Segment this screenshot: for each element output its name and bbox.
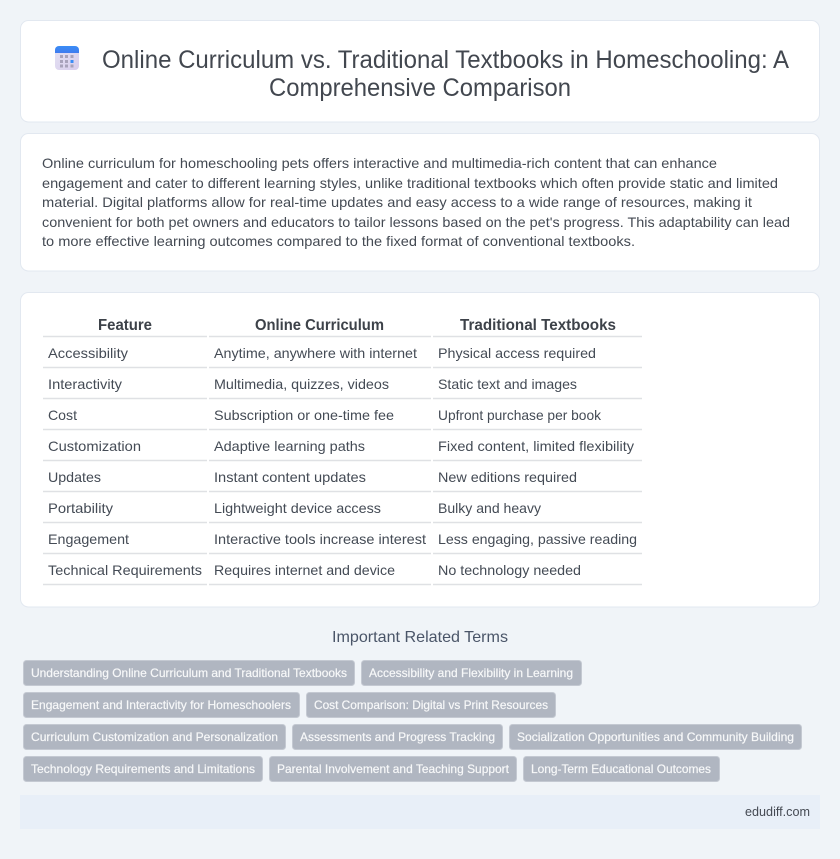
row: accessibility: Anytime, anywhere with internet (214, 345, 417, 361)
row: portability (48, 500, 541, 516)
tag: Curriculum Customization and Personalization (31, 730, 278, 744)
row: customization (48, 438, 634, 454)
row: portability: Bulky and heavy (438, 500, 541, 516)
row: interactivity (48, 376, 577, 392)
table header: Online Curriculum (255, 317, 384, 334)
row: portability: Portability (48, 500, 113, 516)
tag: Cost Comparison: Digital vs Print Resources (314, 698, 548, 712)
tag (270, 756, 516, 782)
title (102, 46, 789, 102)
row: cost: Subscription or one-time fee (214, 407, 394, 423)
row: updates: New editions required (438, 469, 577, 485)
panel: header (20, 20, 820, 122)
row: cost (48, 407, 602, 423)
row: accessibility (48, 345, 596, 361)
tag: Accessibility and Flexibility in Learning (369, 666, 573, 680)
row: portability: Lightweight device access (214, 500, 381, 516)
tag (510, 724, 802, 750)
tag: Long-Term Educational Outcomes (531, 762, 711, 776)
row: customization: Fixed content, limited flexibility (438, 438, 634, 454)
table header: Feature (98, 317, 152, 334)
row: technical requirements: No technology needed (438, 562, 581, 578)
title: Online Curriculum vs. Traditional Textbooks in Homeschooling: A (102, 46, 789, 74)
tag (24, 692, 300, 718)
text block: introduction paragraph: to more effective learning outcomes compared to the fixed format of conventional textbooks. (42, 233, 635, 249)
tag: Socialization Opportunities and Community Building (517, 730, 794, 744)
heading: important related terms: Important Related Terms (332, 629, 508, 646)
row: cost: Upfront purchase per book (438, 407, 602, 423)
row: updates: Updates (48, 469, 101, 485)
tag: Parental Involvement and Teaching Support (277, 762, 510, 776)
footer: edudiff.com (745, 804, 810, 819)
tag (292, 724, 502, 750)
tag: Technology Requirements and Limitations (31, 762, 255, 776)
row: technical requirements: Requires internet and device (214, 562, 395, 578)
row: updates (48, 469, 577, 485)
row: technical requirements: Technical Requirements (48, 562, 202, 578)
table header: Traditional Textbooks (460, 317, 616, 334)
tag: Engagement and Interactivity for Homeschoolers (31, 698, 291, 712)
tags: related terms (24, 660, 802, 782)
row: customization: Customization (48, 438, 141, 454)
panel: introduction (20, 134, 820, 271)
icon: calendar (55, 46, 79, 70)
tag (24, 724, 286, 750)
footer (20, 795, 820, 829)
row: engagement: Interactive tools increase interest (214, 531, 426, 547)
table header (98, 317, 616, 334)
row: accessibility: Physical access required (438, 345, 596, 361)
tag: Understanding Online Curriculum and Traditional Textbooks (31, 666, 347, 680)
tag (24, 756, 262, 782)
row: interactivity: Interactivity (48, 376, 122, 392)
text block: introduction paragraph: engagement and cater to different learning styles, unlike traditional textbooks which often provide static and limited (42, 175, 778, 191)
row: engagement: Engagement (48, 531, 129, 547)
text block: introduction paragraph: convenient for both pet owners and educators to tailor lessons based on the pet's progress. This adaptability can lead (42, 214, 790, 230)
tag (362, 660, 582, 686)
tag (24, 660, 354, 686)
row: cost: Cost (48, 407, 77, 423)
row: accessibility: Accessibility (48, 345, 128, 361)
row: updates: Instant content updates (214, 469, 366, 485)
text block: introduction paragraph (42, 155, 790, 249)
text block: introduction paragraph: material. Digital platforms allow for real-time updates and easy access to a wide range of resources, making it (42, 194, 752, 210)
tag: Assessments and Progress Tracking (300, 730, 495, 744)
tag (524, 756, 720, 782)
row: engagement: Less engaging, passive reading (438, 531, 637, 547)
row: interactivity: Multimedia, quizzes, videos (214, 376, 389, 392)
row: interactivity: Static text and images (438, 376, 577, 392)
text block: introduction paragraph: Online curriculum for homeschooling pets offers interactive and multimedia-rich content that can enhance (42, 155, 717, 171)
tag (306, 692, 556, 718)
panel: comparison table (20, 292, 820, 607)
row: engagement (48, 531, 637, 547)
title: Comprehensive Comparison (269, 74, 571, 102)
row: technical requirements (48, 562, 581, 578)
row: customization: Adaptive learning paths (214, 438, 365, 454)
